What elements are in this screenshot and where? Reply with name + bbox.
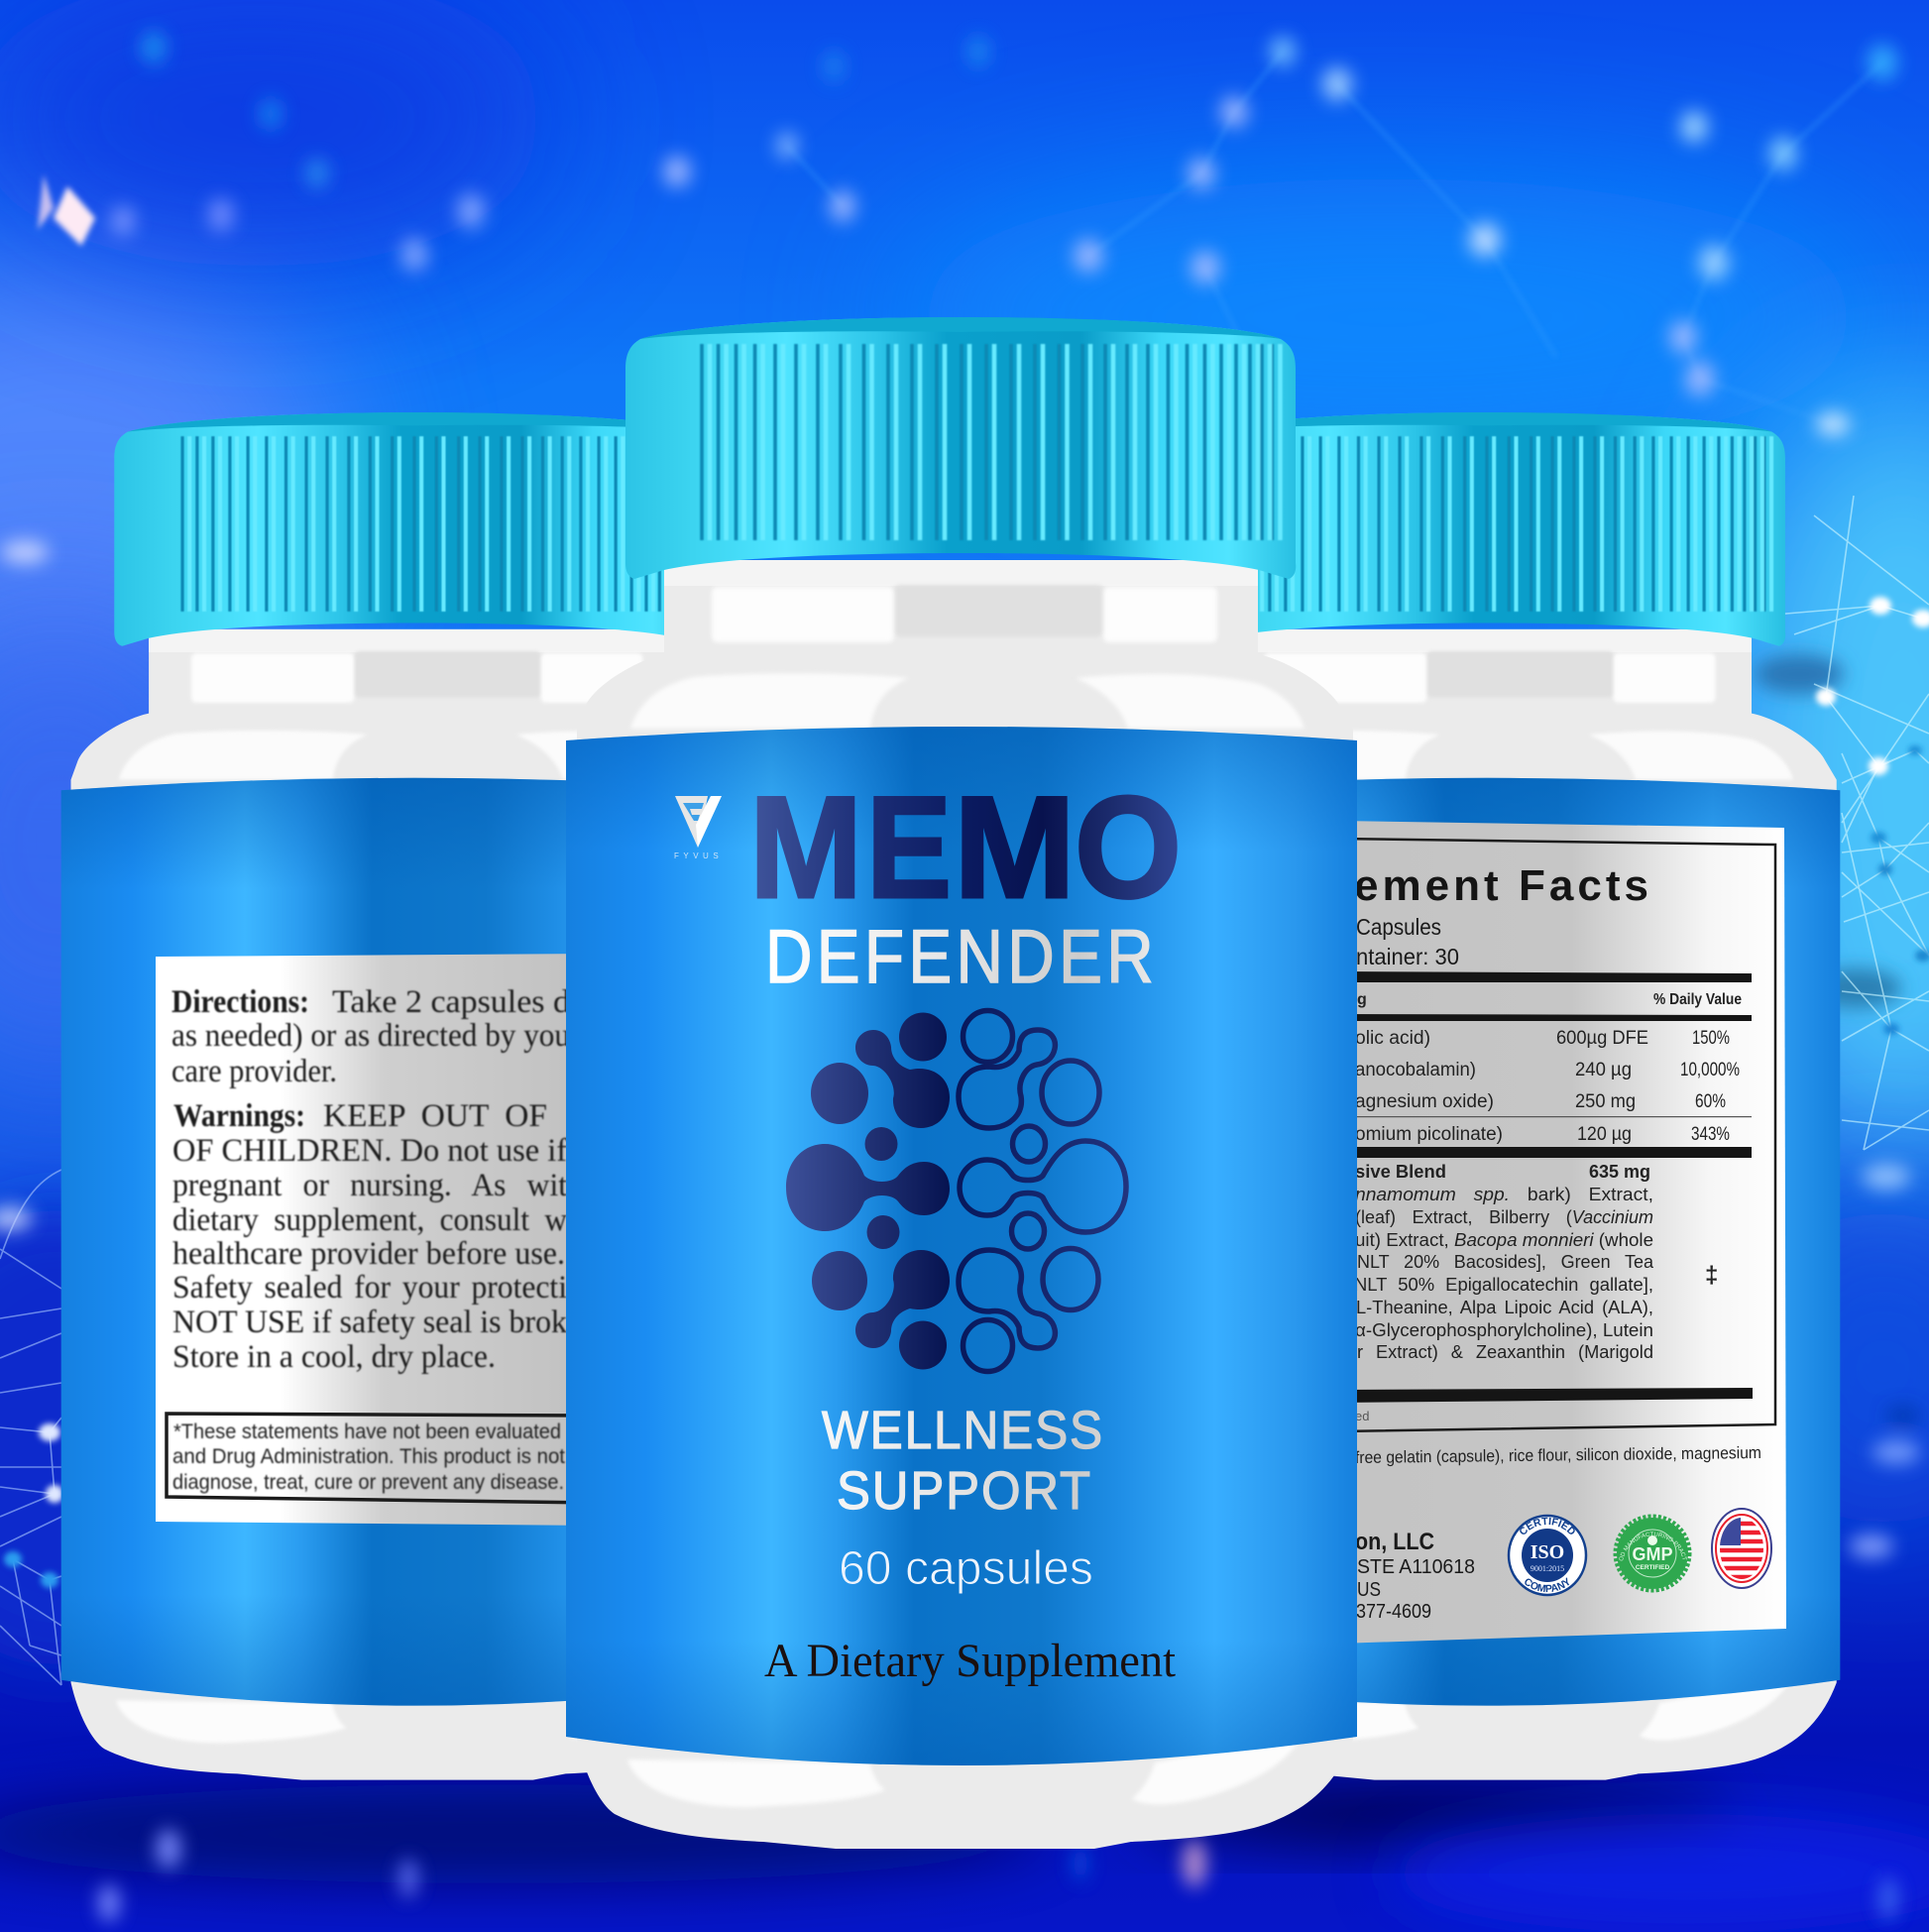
table rows: 343% xyxy=(1691,1124,1730,1145)
text: wellness support: WELLNESS xyxy=(822,1401,1104,1460)
proprietary blend: L-Theanine, Alpa Lipoic Acid (ALA), xyxy=(1356,1297,1653,1317)
text: directions: care provider. xyxy=(171,1054,337,1089)
title: MEMO: M xyxy=(954,766,1076,928)
heading: supplement facts: ement Facts xyxy=(1354,861,1652,910)
table rows: 240 µg xyxy=(1575,1060,1632,1080)
text: warnings: pregnant or nursing. As wit xyxy=(172,1168,567,1203)
disclaimer box: and Drug Administration. This product is not xyxy=(172,1445,565,1468)
manufacturer address xyxy=(1355,1529,1475,1623)
proprietary blend: NLT 50% Epigallocatechin gallate], xyxy=(1354,1274,1653,1295)
serving info xyxy=(1356,914,1459,969)
title: MEMO: E xyxy=(866,766,952,928)
text: wellness support: SUPPORT xyxy=(837,1461,1092,1521)
proprietary blend: (leaf) Extract, Bilberry (Vaccinium xyxy=(1355,1206,1653,1227)
icon: ISO badge: COMPANY xyxy=(1525,1577,1569,1592)
manufacturer address: on, LLC xyxy=(1355,1529,1434,1555)
table header: g xyxy=(1357,991,1367,1008)
proprietary blend: ‡ xyxy=(1705,1262,1718,1289)
proprietary blend xyxy=(1354,1161,1718,1362)
icon: ISO badge xyxy=(1507,1515,1588,1596)
table rows: 600µg DFE xyxy=(1556,1028,1648,1049)
proprietary blend: 635 mg xyxy=(1589,1161,1650,1182)
icon: ISO badge: ISO xyxy=(1531,1541,1564,1563)
disclaimer box xyxy=(167,1414,595,1503)
table rows: 120 µg xyxy=(1577,1124,1632,1145)
table rows xyxy=(1355,1028,1740,1145)
title: MEMO xyxy=(749,766,1182,928)
icon: brain network xyxy=(786,1011,1126,1372)
proprietary blend: r Extract) & Zeaxanthin (Marigold xyxy=(1357,1341,1653,1362)
text: a dietary supplement: A Dietary Supplement xyxy=(764,1635,1177,1687)
text: warnings: NOT USE if safety seal is brok xyxy=(172,1305,567,1340)
left half: solid nodes xyxy=(786,1013,950,1370)
text: wellness support xyxy=(822,1401,1104,1521)
icon: GMP badge: GOOD MANUFACTURING PRACTICE xyxy=(1619,1532,1687,1560)
rules xyxy=(1338,971,1753,1403)
text: 60 capsules: 60 capsules xyxy=(839,1542,1093,1595)
right half: outlined nodes xyxy=(959,1011,1126,1372)
table rows: anocobalamin) xyxy=(1355,1060,1476,1080)
icon: GMP badge: CERTIFIED xyxy=(1636,1564,1669,1571)
text: directions xyxy=(171,984,571,1089)
icon: ISO badge: CERTIFIED xyxy=(1520,1517,1575,1534)
text: warnings: Warnings: xyxy=(173,1098,305,1134)
proprietary blend: NLT 20% Bacosides], Green Tea xyxy=(1357,1251,1654,1272)
text: warnings: healthcare provider before use. xyxy=(172,1236,565,1272)
text: warnings: OF CHILDREN. Do not use if xyxy=(172,1133,567,1169)
left bottle (back panel) xyxy=(61,412,767,1780)
icon: GMP badge xyxy=(1614,1515,1691,1592)
right bottle (supplement facts panel) xyxy=(1258,412,1840,1780)
manufacturer address: STE A110618 xyxy=(1357,1556,1475,1578)
proprietary blend: uit) Extract, Bacopa monnieri (whole xyxy=(1355,1229,1653,1250)
background network: faint upper lines xyxy=(787,52,1882,424)
title: MEMO: M xyxy=(749,766,862,928)
text: warnings: dietary supplement, consult w xyxy=(172,1202,567,1238)
text: warnings xyxy=(172,1098,567,1375)
table rows: olic acid) xyxy=(1355,1028,1430,1049)
other ingredients: free gelatin (capsule), rice flour, silicon dioxide, magnesium xyxy=(1355,1443,1761,1467)
icon: US flag badge xyxy=(1712,1509,1771,1588)
bright flare top left xyxy=(38,174,95,246)
table rows: 10,000% xyxy=(1680,1060,1740,1080)
text: warnings: Store in a cool, dry place. xyxy=(172,1339,496,1375)
table rows: 60% xyxy=(1695,1091,1726,1112)
panel: directions and warnings xyxy=(156,954,595,1526)
center bottle (front panel) xyxy=(566,317,1357,1849)
serving info: Capsules xyxy=(1356,914,1441,940)
title: MEMO: O xyxy=(1075,766,1182,928)
table rows: 150% xyxy=(1692,1028,1730,1049)
proprietary blend: α-Glycerophosphorylcholine), Lutein xyxy=(1355,1319,1653,1340)
text: directions: as needed) or as directed by you xyxy=(171,1018,570,1054)
text: directions: Take 2 capsules d xyxy=(332,984,571,1020)
panel: supplement facts xyxy=(1354,821,1786,1644)
icon: ISO badge: 9001:2015 xyxy=(1531,1564,1564,1573)
background network: left side xyxy=(0,1170,61,1685)
proprietary blend: sive Blend xyxy=(1355,1161,1446,1182)
title: DEFENDER: DEFENDER xyxy=(765,915,1158,999)
icon: GMP badge: GMP xyxy=(1632,1544,1673,1564)
table header xyxy=(1357,991,1742,1008)
text: warnings: KEEP OUT OF xyxy=(323,1098,547,1134)
disclaimer box: diagnose, treat, cure or prevent any disease. xyxy=(172,1471,564,1494)
icon: FYVUS logo: FYVUS xyxy=(674,852,723,860)
table rows: agnesium oxide) xyxy=(1355,1091,1494,1112)
background network: bright nodes xyxy=(4,597,1929,1588)
table header: % Daily Value xyxy=(1653,991,1742,1008)
manufacturer address: 377-4609 xyxy=(1356,1601,1431,1623)
text: warnings: Safety sealed for your protecti xyxy=(172,1270,567,1306)
icon: FYVUS logo xyxy=(674,796,723,860)
table rows: omium picolinate) xyxy=(1355,1124,1503,1145)
text: directions: Directions: xyxy=(171,984,309,1020)
disclaimer box: *These statements have not been evaluated xyxy=(173,1421,561,1443)
serving info: ntainer: 30 xyxy=(1356,944,1459,969)
proprietary blend: nnamomum spp. bark) Extract, xyxy=(1355,1184,1653,1204)
background network: right side xyxy=(1774,496,1929,1150)
manufacturer address: US xyxy=(1357,1579,1381,1601)
table rows: 250 mg xyxy=(1575,1091,1636,1112)
footnote: ed xyxy=(1355,1409,1369,1423)
